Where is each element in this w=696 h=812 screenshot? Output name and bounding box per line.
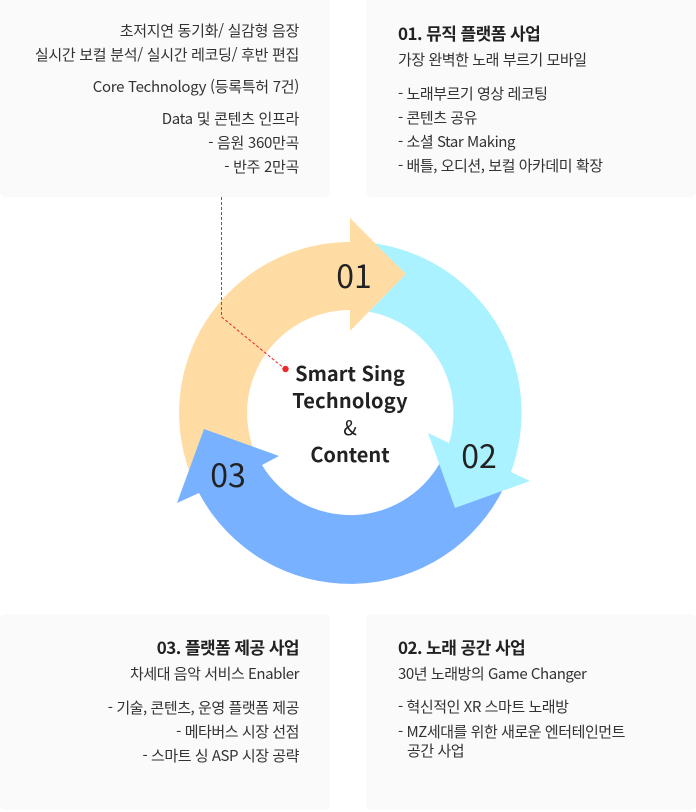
text: data infrastructure: Data 및 콘텐츠 인프라	[162, 108, 299, 129]
panel: 03 platform provision	[0, 614, 330, 810]
panel: 01 music platform	[366, 0, 696, 197]
heading: 03: 03. 플랫폼 제공 사업	[157, 634, 299, 659]
text: 03 item 1: - 기술, 콘텐츠, 운영 플랫폼 제공	[108, 697, 299, 718]
leader line	[222, 197, 285, 369]
text: 01 subtitle: 가장 완벽한 노래 부르기 모바일	[398, 49, 587, 70]
heading: 01: 01. 뮤직 플랫폼 사업	[398, 20, 540, 45]
text: 01 item 4: - 배틀, 오디션, 보컬 아카데미 확장	[398, 155, 603, 176]
text: 03 item 2: - 메타버스 시장 선점	[176, 721, 299, 742]
arrow 01: orange	[179, 218, 406, 493]
text: core technology patents: Core Technology (등록특허 7건)	[93, 76, 299, 97]
number 03: 03	[210, 451, 246, 497]
text: 02 item 2: - MZ세대를 위한 새로운 엔터테인먼트	[398, 721, 625, 742]
text: music sources: - 음원 360만곡	[208, 132, 299, 153]
text: latency and sound: 초저지연 동기화/ 실감형 음장	[120, 20, 299, 41]
text: 02 subtitle: 30년 노래방의 Game Changer	[398, 663, 586, 684]
text: 01 item 3: - 소셜 Star Making	[398, 131, 515, 152]
text: 02 item 1: - 혁신적인 XR 스마트 노래방	[398, 696, 568, 717]
panel: core technology	[0, 0, 330, 197]
red dot	[282, 366, 289, 372]
number 02: 02	[461, 432, 497, 478]
center title: &	[343, 412, 357, 441]
arrow 03: blue	[177, 429, 505, 584]
text: vocal analysis: 실시간 보컬 분석/ 실시간 레코딩/ 후반 편집	[35, 44, 299, 65]
heading: 02: 02. 노래 공간 사업	[398, 634, 525, 659]
text: 01 item 1: - 노래부르기 영상 레코팅	[398, 83, 548, 104]
arrow 02: cyan	[369, 244, 530, 508]
center title: Content	[310, 439, 390, 468]
center title	[292, 358, 408, 468]
text: 03 subtitle: 차세대 음악 서비스 Enabler	[130, 663, 299, 684]
text: 01 item 2: - 콘텐츠 공유	[398, 107, 477, 128]
panel: 02 karaoke space	[366, 614, 696, 810]
text: accompaniment: - 반주 2만곡	[224, 156, 299, 177]
text: 02 item 2 continued: 공간 사업	[407, 740, 464, 761]
number 01: 01	[336, 252, 372, 298]
center title: Technology	[292, 385, 408, 414]
text: 03 item 3: - 스마트 싱 ASP 시장 공략	[142, 745, 299, 766]
center title: Smart Sing	[295, 358, 405, 387]
